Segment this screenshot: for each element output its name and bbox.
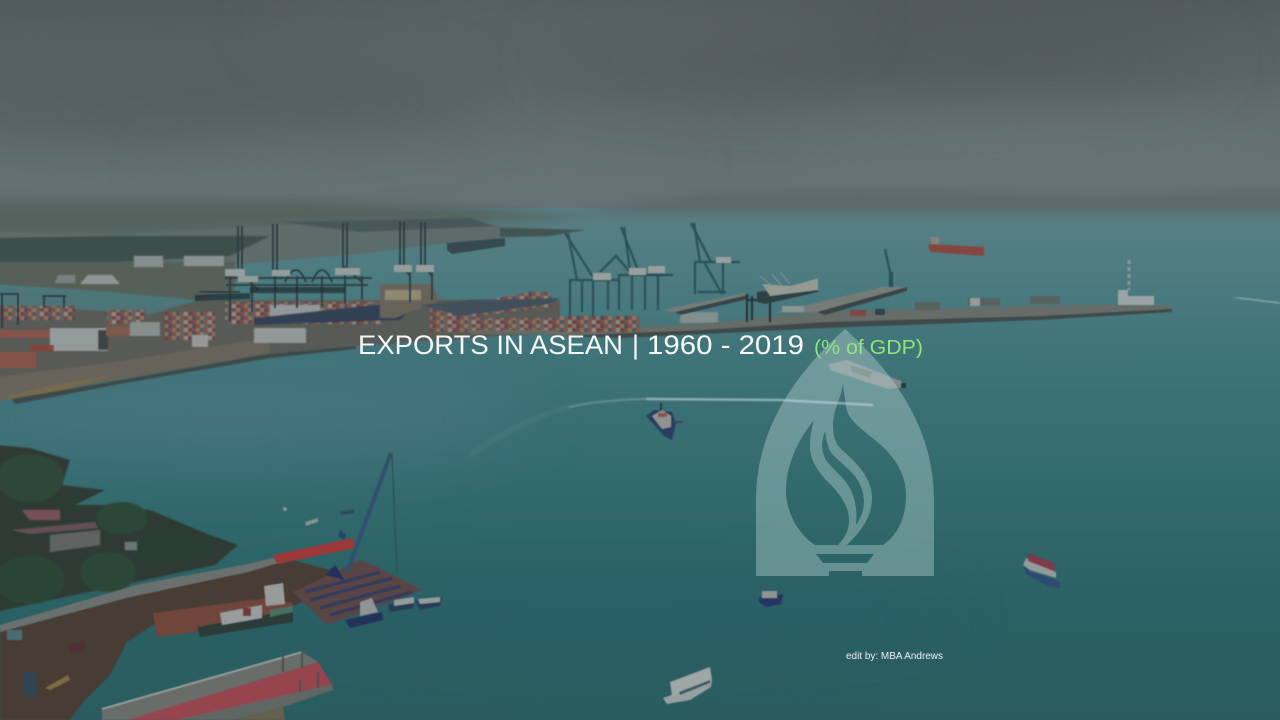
distant hills on the horizon — [0, 188, 1280, 244]
far shore and terminal land — [0, 218, 585, 404]
title: EXPORTS IN ASEAN — [358, 330, 623, 360]
background sky — [0, 0, 1280, 230]
rust barge and moored tug — [153, 583, 293, 637]
boat: white passenger boat — [663, 667, 712, 704]
canal behind the container yard — [0, 288, 195, 316]
vehicles and white building on the pier — [782, 260, 1154, 316]
title: | — [632, 330, 639, 360]
ship at anchor: grey vessel — [447, 238, 505, 254]
quay cranes: far row — [0, 222, 434, 328]
boat: red-roofed ferry — [1023, 553, 1060, 588]
quay cranes: green near row — [565, 223, 892, 322]
title: 1960 - 2019 — [647, 330, 804, 360]
red-decked concrete barge — [102, 651, 333, 720]
logo: translucent flame emblem — [756, 329, 934, 576]
waterfront road and ground at the bottom left — [0, 556, 330, 720]
tugboat in the bay — [646, 403, 683, 440]
container yard buildings and stacks — [0, 284, 718, 368]
boat wake across the bay — [470, 399, 873, 455]
main port landmass — [0, 300, 560, 404]
ship at anchor: red tanker — [928, 237, 984, 256]
bottom left shore with houses and trees — [0, 445, 238, 612]
docked white ship — [757, 272, 818, 304]
boat: small blue boat — [759, 591, 783, 607]
barge passing behind the logo — [829, 360, 906, 389]
credit line: edit by: MBA Andrews — [846, 650, 943, 662]
subtitle: unit label: (% of GDP) — [814, 337, 923, 359]
speedboat wake at right edge — [1232, 297, 1280, 304]
red-roofed shed — [273, 538, 355, 564]
sea — [0, 208, 1280, 720]
moored small boats — [283, 507, 442, 628]
floating dock with crane — [293, 453, 422, 625]
waterfront strip and piers — [540, 287, 1172, 338]
